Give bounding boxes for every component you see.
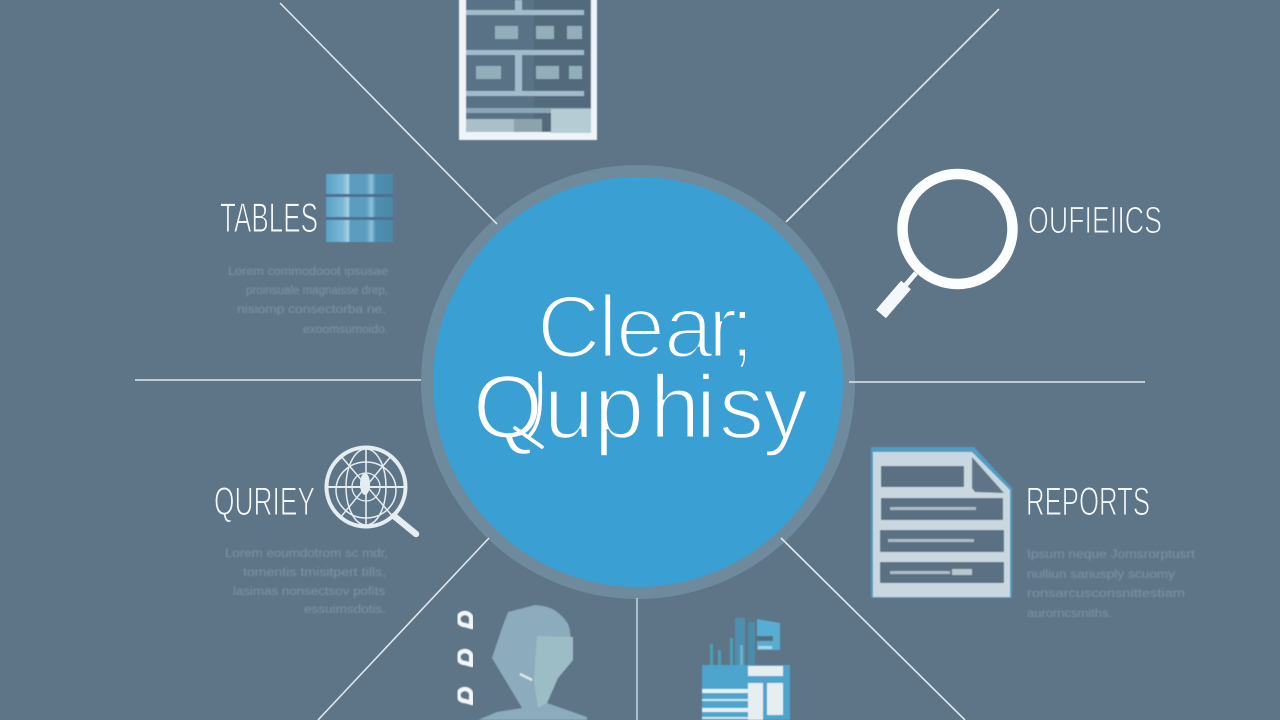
text block: reports: ronsarcusconsnittestiam [1027, 588, 1185, 600]
text block: tables: nisiomp consectorba ne. [237, 304, 386, 316]
central title [473, 277, 808, 458]
person silhouette [478, 605, 587, 720]
heading: tables: TABLES [220, 194, 318, 241]
icon: chart folder [702, 618, 790, 720]
icon: table [326, 174, 393, 242]
text block: query: tomentis tmisitpert tills, [243, 567, 386, 579]
text block: reports: aurorncsmiths. [1027, 608, 1112, 620]
icon: building plan [459, 0, 597, 140]
text block: tables: proinsuale magnaisse drep, [246, 285, 388, 297]
text block: tables [228, 266, 388, 336]
radial divider lines [135, 3, 1145, 720]
text block: reports: Ipsum neque Jomsrorptusrt [1027, 549, 1196, 561]
text block: query [225, 548, 388, 616]
speech bubbles [458, 613, 472, 703]
central circle [421, 165, 855, 599]
text block: query: lasimas nonsectsov pofits [233, 586, 385, 598]
panel: queries [881, 174, 1162, 314]
text block: query: essuimsdotis. [304, 604, 386, 616]
text block: tables: Lorem commodooot ipsusae [228, 266, 388, 278]
text block: reports: nulliun sariusply scuomy [1027, 569, 1175, 581]
heading: queries: OUFIEIICS [1028, 200, 1162, 242]
icon: globe magnifier [326, 448, 416, 534]
text block: reports [1027, 549, 1196, 620]
icon: report document [871, 447, 1012, 598]
text block: tables: exoomsumoido. [303, 324, 388, 336]
panel: query [214, 448, 416, 616]
icon: person with speech bubbles [458, 605, 587, 720]
text block: query: Lorem eoumdotrom sc mdr, [225, 548, 388, 560]
icon: magnifying glass [881, 174, 1012, 314]
panel: tables [220, 174, 393, 336]
heading: query: QURIEY [214, 480, 315, 524]
central title: Quphisy [473, 358, 808, 458]
panel: reports [871, 447, 1196, 620]
central title: Clear; [537, 277, 754, 376]
heading: reports: REPORTS [1026, 480, 1150, 524]
